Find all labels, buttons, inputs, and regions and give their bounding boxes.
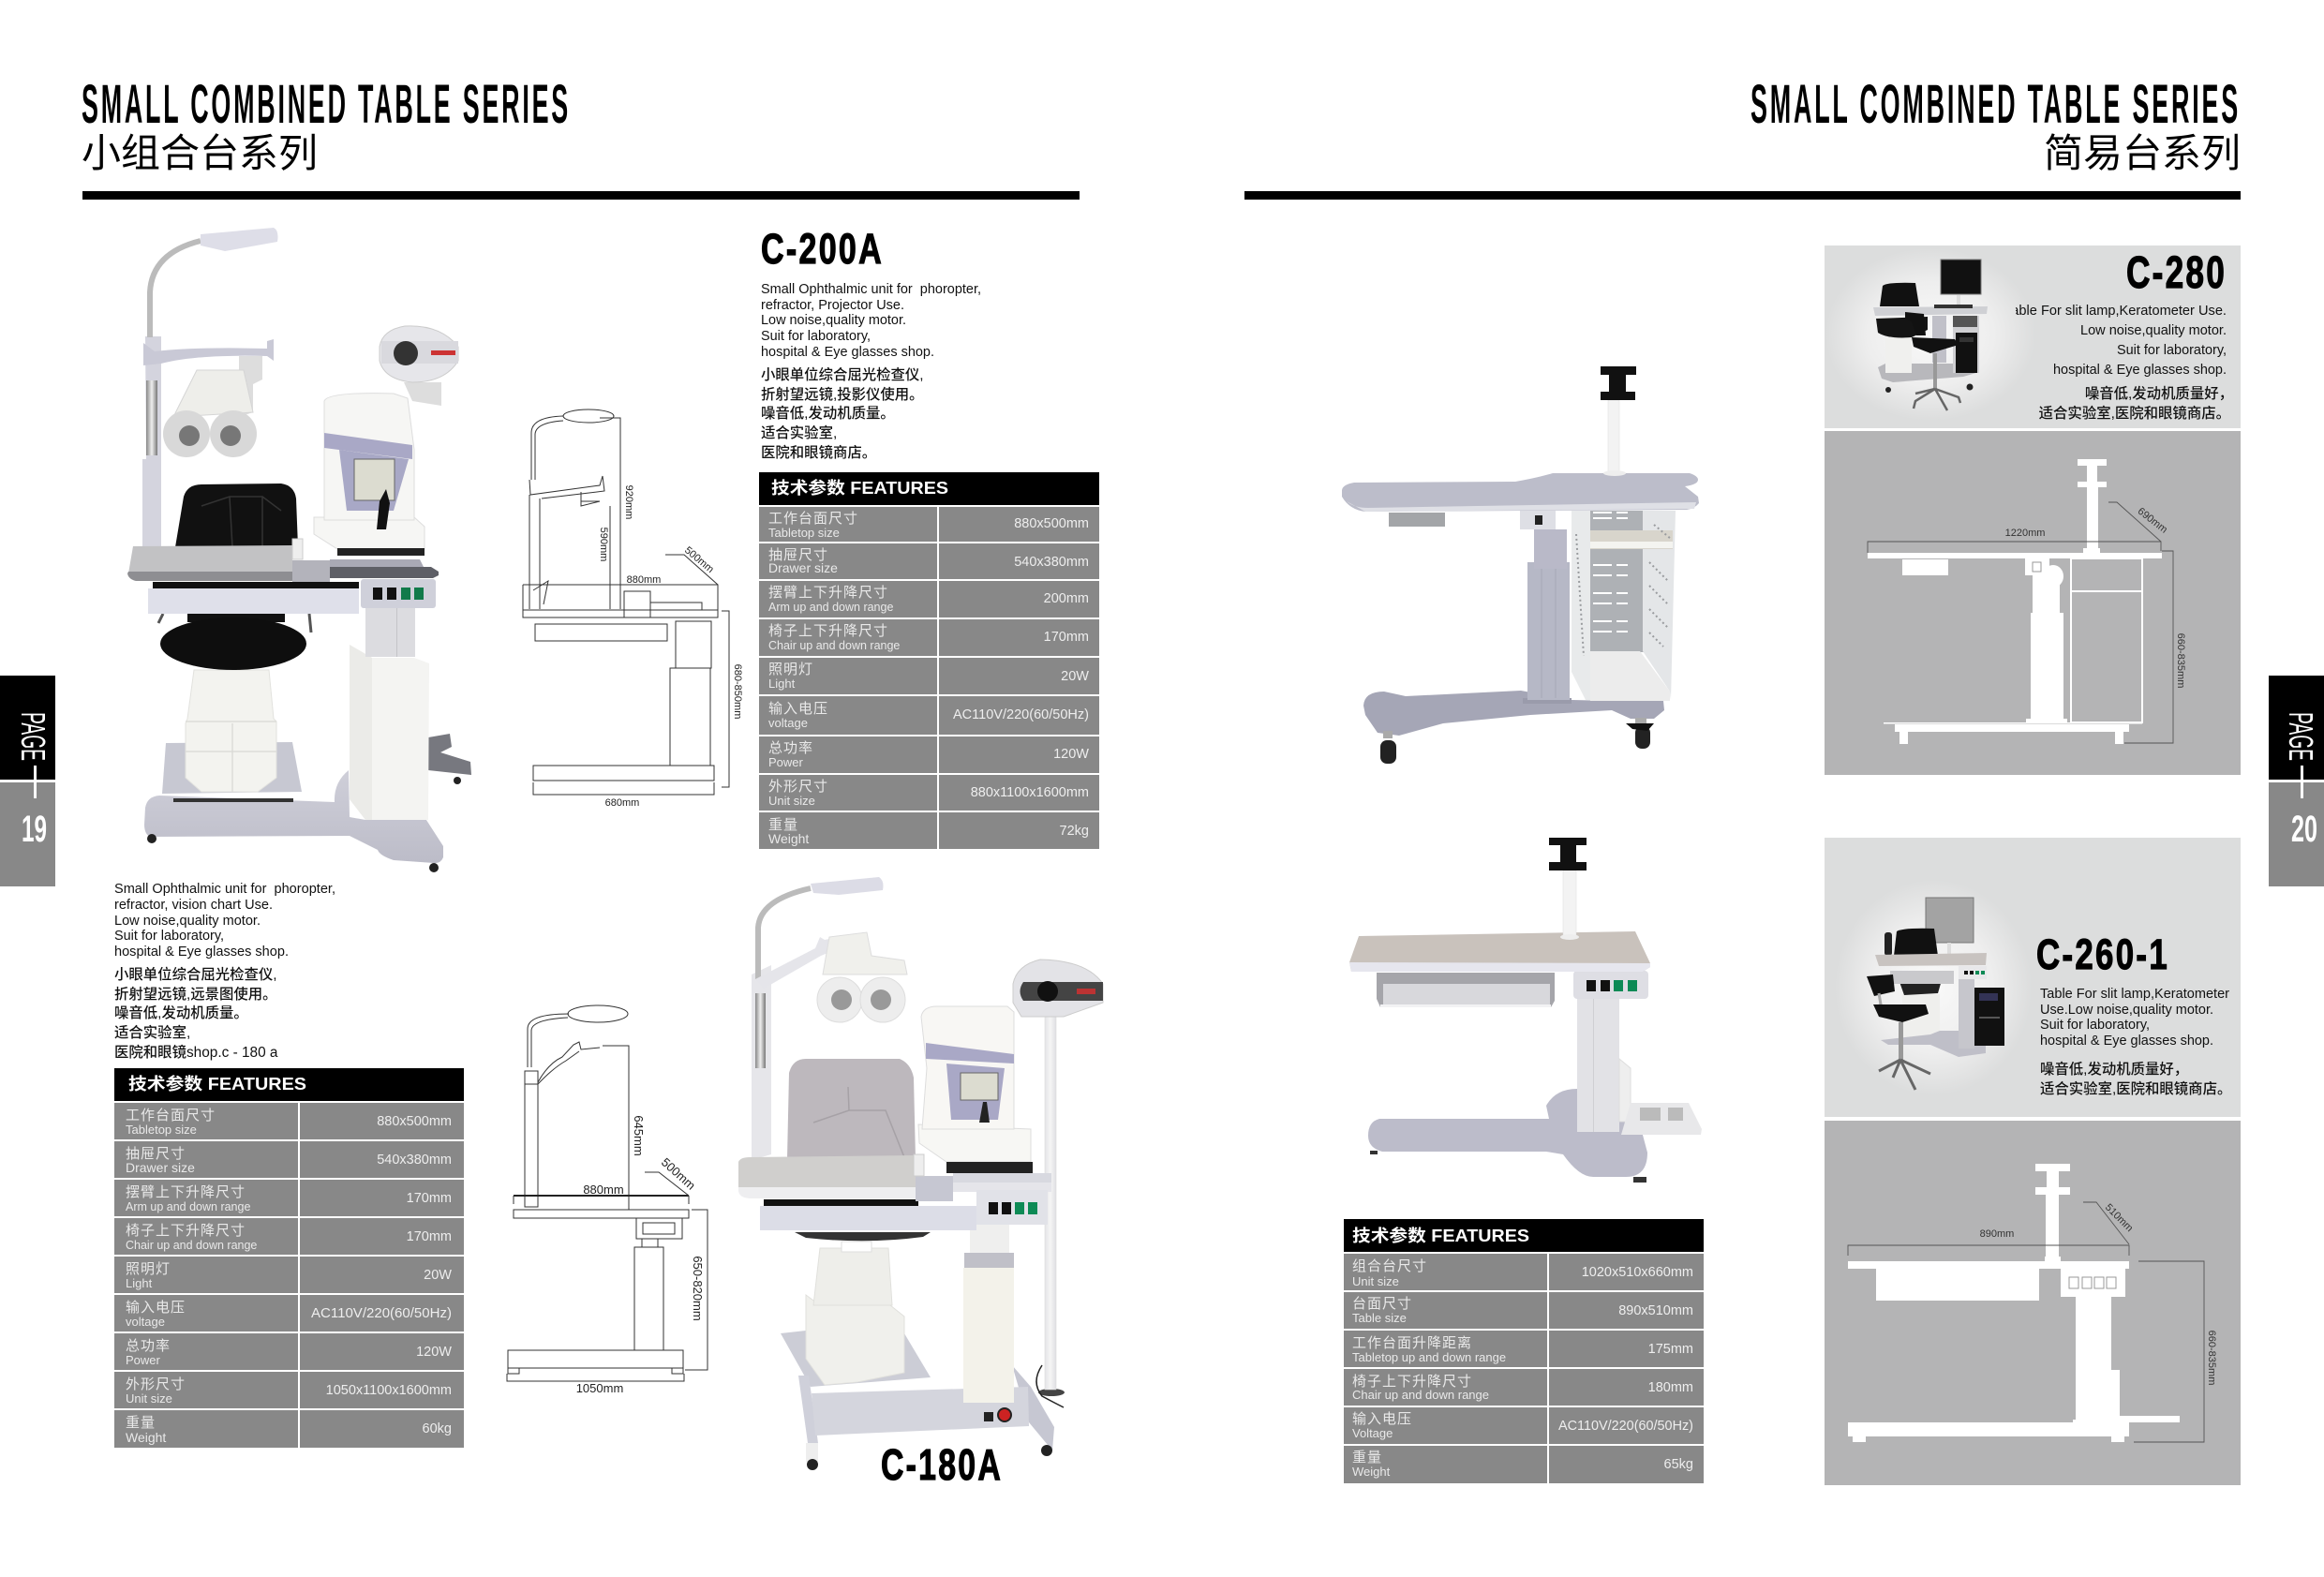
row: chair range: 椅子上下升降尺寸 <box>1352 1374 1472 1390</box>
row: voltage: voltage <box>768 716 808 730</box>
row: light: Light <box>768 677 796 691</box>
row: light: 20W <box>424 1268 452 1283</box>
right page header: 简易台系列 <box>2044 131 2241 175</box>
row: light <box>114 1257 464 1293</box>
row: tabletop size: 880x500mm <box>1014 516 1089 531</box>
dimension drawing: C-180A: 1050mm <box>576 1381 623 1395</box>
C-260-1 description: 噪音低,发动机质量好， <box>2040 1061 2188 1078</box>
C-180A description: 适合实验室, <box>114 1023 190 1041</box>
C-200A description: 适合实验室, <box>761 424 837 441</box>
row: voltage: AC110V/220(60/50Hz) <box>311 1306 452 1321</box>
C-280 description: 适合实验室,医院和眼镜商店。 <box>2039 404 2230 422</box>
C-280 description <box>2016 305 2226 420</box>
left page header: SMALL COMBINED TABLE SERIES <box>82 74 571 135</box>
row: light: 照明灯 <box>768 662 813 677</box>
panel: C-260-1 info <box>1825 838 2241 1117</box>
icon: C-280 mini product photo <box>1825 248 2035 421</box>
drawing: C-260-1 table outline: 660-835mm <box>2206 1331 2217 1385</box>
row: voltage <box>1344 1407 1704 1444</box>
C-200A description <box>761 282 981 461</box>
dimension drawing: C-200A: 880mm <box>627 574 661 586</box>
product photo: C-260-1 table <box>1349 838 1702 1183</box>
row: unit size: 1050x1100x1600mm <box>326 1383 452 1398</box>
row: tabletop size: Tabletop size <box>768 526 840 540</box>
C-200A features table: 技术参数 FEATURES <box>771 478 948 498</box>
row: tabletop range: 工作台面升降距离 <box>1352 1335 1472 1351</box>
row: voltage <box>114 1295 464 1332</box>
row: weight <box>114 1410 464 1448</box>
row: arm range <box>114 1180 464 1216</box>
row: chair range: 椅子上下升降尺寸 <box>126 1223 246 1239</box>
dimension drawing: C-180A: 500mm <box>659 1155 698 1193</box>
C-280 description: 噪音低,发动机质量好， <box>2085 385 2233 402</box>
C-200A description: Small Ophthalmic unit for phoropter, <box>761 282 981 297</box>
dimension drawing: C-180A: 880mm <box>583 1183 624 1197</box>
row: arm range: 170mm <box>407 1191 452 1206</box>
C-180A description: Suit for laboratory, <box>114 929 224 944</box>
drawing: C-260-1 table outline: 510mm <box>2103 1202 2135 1234</box>
drawing: C-280 table outline: 660-835mm <box>2175 633 2186 688</box>
row: voltage: AC110V/220(60/50Hz) <box>1558 1419 1693 1434</box>
row: power: 120W <box>416 1345 452 1360</box>
row: unit size: 外形尺寸 <box>126 1376 186 1392</box>
C-260-1 description: Table For slit lamp,Keratometer <box>2040 987 2229 1002</box>
C-260-1 description <box>2040 987 2231 1097</box>
right page header <box>1244 74 2241 200</box>
C-260-1 features table <box>1344 1219 1704 1483</box>
row: voltage: 输入电压 <box>1352 1411 1412 1427</box>
row: voltage <box>759 696 1099 735</box>
row: drawer size: 抽屉尺寸 <box>126 1146 186 1162</box>
row: weight <box>759 812 1099 849</box>
product photo: C-280 table <box>1342 366 1699 764</box>
row: unit size: Unit size <box>768 794 815 808</box>
row: table size: 台面尺寸 <box>1352 1296 1412 1312</box>
product photo: C-180A unit <box>738 877 1103 1470</box>
C-200A description: hospital & Eye glasses shop. <box>761 345 934 360</box>
drawing: C-280 table outline: 1220mm <box>2005 528 2045 539</box>
dimension drawing: C-200A: 680-850mm <box>732 664 743 719</box>
row: chair range: Chair up and down range <box>1352 1388 1489 1402</box>
C-180A description: 折射望远镜,远景图使用。 <box>114 985 277 1003</box>
C-200A description: Low noise,quality motor. <box>761 313 906 328</box>
row: tabletop size: 880x500mm <box>377 1114 452 1129</box>
row: arm range: Arm up and down range <box>126 1200 250 1213</box>
row: unit size: 880x1100x1600mm <box>971 785 1089 800</box>
row: power: Power <box>126 1353 161 1367</box>
model name C-200A: C-200A <box>761 225 884 273</box>
C-260-1 description: hospital & Eye glasses shop. <box>2040 1034 2213 1049</box>
row: tabletop size <box>759 507 1099 542</box>
row: light: Light <box>126 1276 153 1290</box>
page tab 20 <box>2269 676 2324 886</box>
model name C-280: C-280 <box>2126 248 2227 298</box>
row: power: 总功率 <box>126 1338 171 1354</box>
row: chair range: Chair up and down range <box>768 639 900 652</box>
row: unit size: 外形尺寸 <box>768 779 828 795</box>
C-280 description: Low noise,quality motor. <box>2080 323 2227 338</box>
panel: C-280 dimension drawing <box>1825 431 2241 775</box>
row: drawer size <box>114 1141 464 1178</box>
C-260-1 description: Suit for laboratory, <box>2040 1018 2150 1033</box>
row: chair range: 180mm <box>1648 1380 1693 1395</box>
drawing: C-260-1 table outline: 890mm <box>1980 1228 2014 1240</box>
row: table size: Table size <box>1352 1311 1407 1325</box>
C-280 description: Suit for laboratory, <box>2117 343 2227 358</box>
row: light: 照明灯 <box>126 1261 171 1277</box>
row: light <box>759 658 1099 694</box>
dimension drawing: C-200A: 920mm <box>623 485 634 519</box>
C-180A description: Small Ophthalmic unit for phoropter, <box>114 882 335 897</box>
row: drawer size: 540x380mm <box>377 1153 452 1168</box>
left page header: 小组合台系列 <box>82 131 318 175</box>
C-200A description: 小眼单位综合屈光检查仪, <box>761 365 924 383</box>
dimension drawing: C-200A <box>523 409 743 809</box>
row: drawer size: 540x380mm <box>1014 555 1089 570</box>
dimension drawing: C-200A: 500mm <box>682 544 716 575</box>
row: unit size <box>759 775 1099 811</box>
row: drawer size: Drawer size <box>126 1160 195 1175</box>
row: power <box>759 736 1099 773</box>
row: chair range <box>759 619 1099 656</box>
dimension drawing: C-180A: 645mm <box>632 1115 646 1156</box>
row: weight: Weight <box>126 1430 166 1445</box>
row: tabletop range <box>1344 1331 1704 1367</box>
row: unit size: 1020x510x660mm <box>1582 1265 1693 1280</box>
C-260-1 description: 适合实验室,医院和眼镜商店。 <box>2040 1079 2231 1097</box>
C-200A description: 噪音低,发动机质量。 <box>761 405 895 422</box>
C-180A features table <box>114 1068 464 1448</box>
drawing: C-260-1 table outline <box>1848 1164 2217 1442</box>
row: chair range: 170mm <box>407 1229 452 1244</box>
C-180A description: 噪音低,发动机质量。 <box>114 1004 248 1021</box>
row: tabletop range: Tabletop up and down range <box>1352 1350 1506 1364</box>
row: weight: 重量 <box>1352 1450 1382 1465</box>
row: weight: 重量 <box>126 1415 156 1431</box>
row: power: 120W <box>1053 747 1089 762</box>
row: weight: Weight <box>1352 1465 1391 1479</box>
C-280 description: hospital & Eye glasses shop. <box>2053 363 2227 378</box>
row: unit size: 组合台尺寸 <box>1352 1258 1427 1274</box>
dimension drawing: C-200A: 680mm <box>605 797 639 809</box>
row: table size <box>1344 1292 1704 1329</box>
drawing: C-280 table outline <box>1868 459 2186 744</box>
row: voltage: Voltage <box>1352 1426 1393 1440</box>
row: voltage: voltage <box>126 1315 165 1329</box>
page tab 19: PAGE <box>14 712 52 761</box>
row: drawer size: Drawer size <box>768 560 838 575</box>
row: unit size: Unit size <box>126 1391 172 1406</box>
row: arm range: Arm up and down range <box>768 601 893 614</box>
C-180A features table: 技术参数 FEATURES <box>128 1074 306 1093</box>
C-200A description: 医院和眼镜商店。 <box>761 443 876 461</box>
dimension drawing: C-180A: 650-820mm <box>691 1256 705 1321</box>
C-260-1 features table: 技术参数 FEATURES <box>1352 1226 1529 1245</box>
row: weight: 72kg <box>1060 824 1089 839</box>
dimension drawing: C-180A <box>507 1005 708 1395</box>
row: tabletop size: Tabletop size <box>126 1123 197 1137</box>
C-200A description: refractor, Projector Use. <box>761 298 904 313</box>
C-280 description: Table For slit lamp,Keratometer Use. <box>2004 304 2227 319</box>
row: chair range: 170mm <box>1044 630 1089 645</box>
row: arm range: 摆臂上下升降尺寸 <box>126 1184 246 1200</box>
row: drawer size: 抽屉尺寸 <box>768 547 828 563</box>
C-180A description <box>114 882 335 1061</box>
C-200A features table <box>759 472 1099 849</box>
row: power <box>114 1333 464 1370</box>
row: arm range: 摆臂上下升降尺寸 <box>768 585 888 601</box>
model name C-260-1: C-260-1 <box>2036 930 2169 978</box>
C-180A description: 医院和眼镜shop.c - 180 a <box>114 1043 278 1061</box>
row: light: 20W <box>1061 669 1089 684</box>
row: unit size: Unit size <box>1352 1274 1399 1288</box>
page tab 20: PAGE <box>2282 712 2320 761</box>
row: tabletop size <box>114 1103 464 1139</box>
row: unit size <box>114 1372 464 1408</box>
row: chair range: Chair up and down range <box>126 1239 257 1252</box>
row: weight: Weight <box>768 831 809 846</box>
page tab 19 <box>0 676 55 886</box>
row: voltage: 输入电压 <box>126 1300 186 1316</box>
row: power: 总功率 <box>768 740 813 756</box>
C-180A description: hospital & Eye glasses shop. <box>114 945 289 960</box>
C-180A description: 小眼单位综合屈光检查仪, <box>114 965 277 983</box>
row: chair range <box>1344 1369 1704 1406</box>
row: weight: 65kg <box>1664 1457 1693 1472</box>
row: chair range: 椅子上下升降尺寸 <box>768 623 888 639</box>
left page header <box>82 74 1080 200</box>
row: unit size <box>1344 1254 1704 1290</box>
row: chair range <box>114 1218 464 1255</box>
C-200A description: Suit for laboratory, <box>761 329 871 344</box>
C-200A description: 折射望远镜,投影仪使用。 <box>761 385 924 403</box>
product photo: C-200A unit <box>127 228 471 872</box>
row: tabletop range: 175mm <box>1648 1342 1693 1357</box>
row: weight: 重量 <box>768 817 798 833</box>
row: voltage: 输入电压 <box>768 701 828 717</box>
row: tabletop size: 工作台面尺寸 <box>126 1108 216 1123</box>
panel: C-280 info <box>1825 245 2241 428</box>
row: voltage: AC110V/220(60/50Hz) <box>953 707 1089 722</box>
page tab 19: 19 <box>22 809 47 850</box>
model name C-180A: C-180A <box>881 1440 1003 1489</box>
drawing: C-280 table outline: 690mm <box>2136 506 2169 536</box>
panel: C-260-1 dimension drawing <box>1825 1121 2241 1485</box>
row: table size: 890x510mm <box>1618 1303 1693 1318</box>
C-180A description: Low noise,quality motor. <box>114 914 261 929</box>
row: weight <box>1344 1446 1704 1483</box>
row: arm range: 200mm <box>1044 591 1089 606</box>
icon: C-260-1 mini product photo <box>1835 880 2032 1095</box>
row: weight: 60kg <box>423 1421 452 1436</box>
row: tabletop size: 工作台面尺寸 <box>768 511 858 527</box>
row: arm range <box>759 581 1099 617</box>
dimension drawing: C-200A: 590mm <box>598 528 609 561</box>
row: power: Power <box>768 755 804 769</box>
row: drawer size <box>759 543 1099 579</box>
C-260-1 description: Use.Low noise,quality motor. <box>2040 1003 2213 1018</box>
C-180A description: refractor, vision chart Use. <box>114 898 273 913</box>
